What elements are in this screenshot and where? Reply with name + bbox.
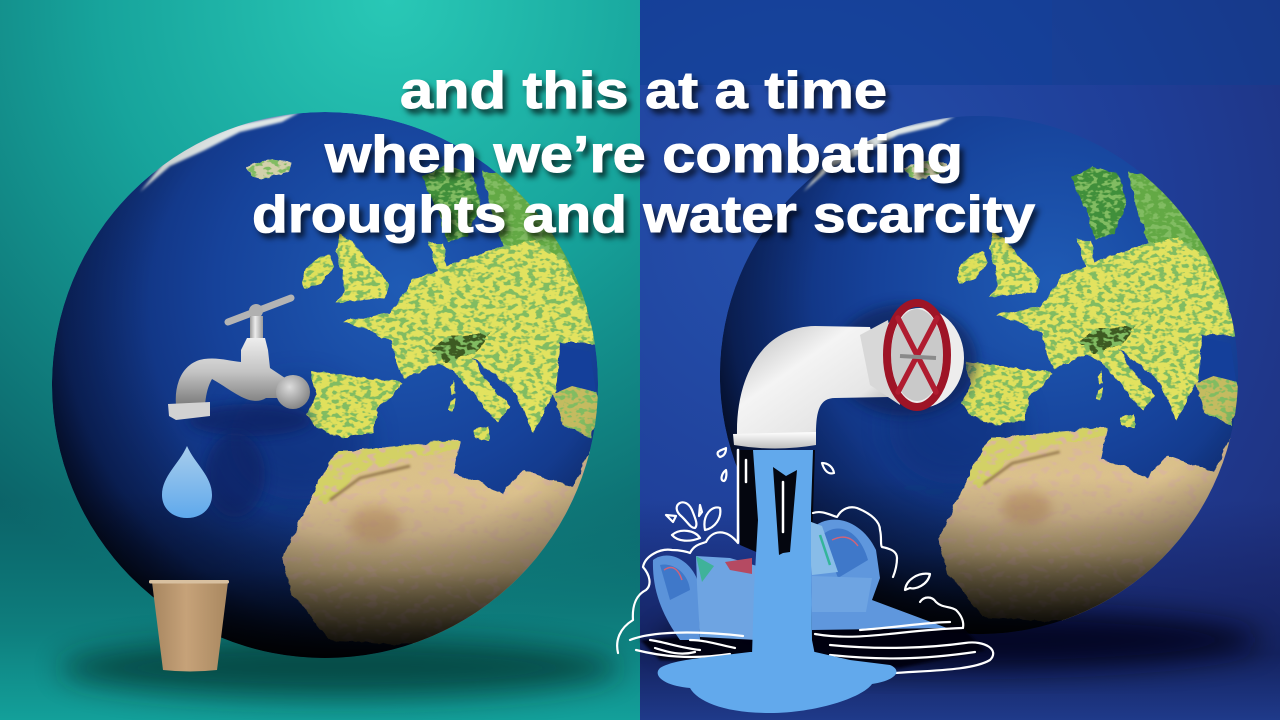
globe: left earth	[40, 100, 610, 660]
line 3: droughts and water scarcity	[252, 186, 1035, 244]
globe: right earth	[709, 105, 1249, 636]
illustration: white splash outlines	[617, 448, 993, 675]
illustration: crumpled plastic cups	[640, 520, 985, 668]
illustration: black gap behind water stream	[738, 450, 815, 560]
panel: left teal background	[0, 0, 640, 720]
illustration: water stream	[752, 450, 815, 655]
line 2: when we’re combating	[324, 126, 963, 184]
panel: right blue background	[640, 0, 1280, 720]
icon: dripping faucet	[168, 298, 312, 517]
title text	[252, 62, 1035, 244]
icon: red valve pipe	[733, 303, 977, 448]
icon: water drop	[162, 446, 212, 518]
line 1: and this at a time	[400, 62, 887, 120]
icon: paper cup	[149, 580, 229, 672]
illustration: water puddle	[658, 652, 896, 713]
